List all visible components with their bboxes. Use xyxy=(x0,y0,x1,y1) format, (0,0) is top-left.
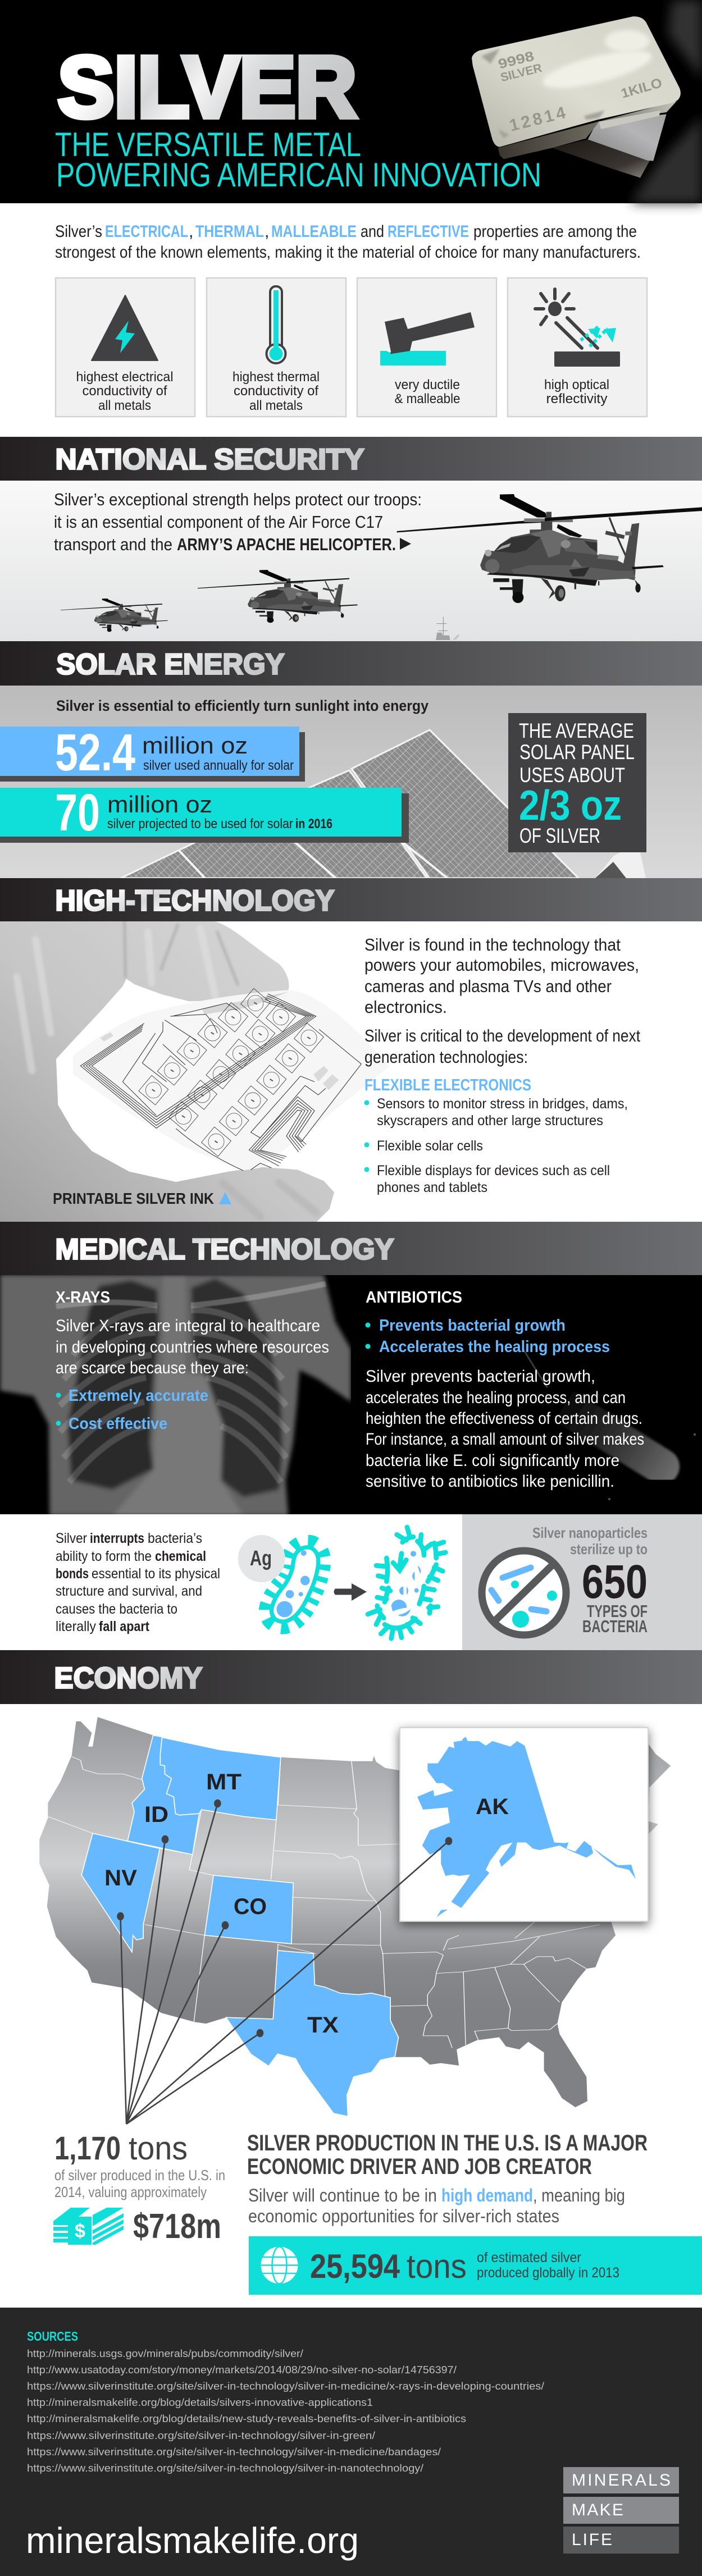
stat text: TYPES OF xyxy=(587,1601,648,1621)
heading bar: NATIONAL SECURITY xyxy=(55,444,364,476)
stat bar: 52.4 million oz: silver used annually for solar xyxy=(143,758,294,773)
bullet list: skyscrapers and other large structures xyxy=(377,1113,603,1129)
logo: LIFE xyxy=(572,2531,612,2549)
text block: , meaning big xyxy=(533,2185,625,2205)
state labels: CO xyxy=(234,1894,267,1919)
state labels: TX xyxy=(307,2013,339,2038)
text block: essential to its physical xyxy=(92,1566,220,1582)
text block: ability to form the xyxy=(56,1549,152,1564)
heading bar: HIGH-TECHNOLOGY xyxy=(55,885,335,917)
stat bar: 70 million oz: 70 xyxy=(55,783,100,842)
block: x-rays: in developing countries where resources xyxy=(56,1338,329,1356)
stat bar: global production xyxy=(249,2236,702,2295)
bullet list: Flexible solar cells xyxy=(377,1138,483,1154)
subheading: FLEXIBLE ELECTRONICS xyxy=(364,1076,531,1094)
text block: causes the bacteria to xyxy=(56,1601,177,1617)
heading bar xyxy=(0,1650,702,1704)
ship mast xyxy=(436,616,459,640)
panel: how silver kills bacteria xyxy=(0,1514,462,1651)
block: antibiotics: For instance, a small amount of silver makes xyxy=(366,1430,644,1449)
photo: silver bars: 12814 xyxy=(508,103,568,135)
subtitle xyxy=(55,126,541,194)
block: antibiotics: heighten the effectiveness of certain drugs. xyxy=(366,1409,642,1428)
heading bar: MEDICAL TECHNOLOGY xyxy=(55,1233,394,1266)
state labels: ID xyxy=(144,1802,168,1827)
title: SILVER xyxy=(58,39,357,135)
heading bar: ECONOMY xyxy=(54,1662,202,1695)
block: antibiotics: Accelerates the healing process xyxy=(379,1338,610,1356)
heading: economic driver: ECONOMIC DRIVER AND JOB CREATOR xyxy=(247,2154,592,2179)
text block xyxy=(54,490,422,554)
block: antibiotics: ANTIBIOTICS xyxy=(366,1289,462,1307)
block: antibiotics: bacteria like E. coli significantly more xyxy=(366,1451,619,1470)
label: high optical xyxy=(544,377,609,392)
sources: http://mineralsmakelife.org/blog/details/silvers-innovative-applications1 xyxy=(27,2397,373,2408)
intro text: and xyxy=(361,222,384,241)
panel background xyxy=(0,921,702,1222)
label xyxy=(76,369,173,413)
label: conductivity of xyxy=(82,383,167,399)
label: all metals xyxy=(249,398,303,413)
sources: https://www.silverinstitute.org/site/silver-in-technology/silver-in-medicine/x-rays-in-developing-countries/ xyxy=(27,2381,544,2392)
map of united states xyxy=(39,1717,671,2116)
intro text: REFLECTIVE xyxy=(388,222,469,241)
sources: https://www.silverinstitute.org/site/silver-in-technology/silver-in-green/ xyxy=(27,2430,375,2441)
stat: $718m: $718m xyxy=(133,2207,221,2246)
stat bar: 70 million oz: silver projected to be used for solar xyxy=(107,816,293,832)
text block: interrupts xyxy=(90,1531,144,1546)
block: x-rays: X-RAYS xyxy=(56,1289,110,1307)
heading bar xyxy=(0,1222,702,1275)
panel background xyxy=(0,686,702,878)
label: reflectivity xyxy=(546,391,608,407)
blue states xyxy=(81,1735,399,2116)
callout: 2/3 oz: OF SILVER xyxy=(519,824,600,847)
label: very ductile xyxy=(395,377,460,392)
label: all metals xyxy=(98,398,151,413)
text block: chemical xyxy=(155,1549,206,1564)
callout: 2/3 oz: USES ABOUT xyxy=(519,764,625,787)
panel background xyxy=(0,1275,702,1514)
icon: hammer xyxy=(380,312,475,366)
stat: 1,170 tons: tons xyxy=(129,2130,188,2167)
intro text xyxy=(55,222,641,262)
text block: Silver xyxy=(56,1531,87,1546)
stat: 1,170 tons: 1,170 xyxy=(54,2130,121,2167)
text block: high demand xyxy=(441,2185,533,2205)
text block: fall apart xyxy=(99,1619,150,1634)
icon: thermometer xyxy=(266,286,285,363)
stat bar: 70 million oz xyxy=(0,783,409,843)
icon: silver atom: Ag xyxy=(250,1547,272,1570)
callout: 2/3 oz: THE AVERAGE xyxy=(519,719,634,742)
state labels: AK xyxy=(476,1794,509,1819)
stat bar: global production: of estimated silver xyxy=(477,2250,581,2266)
inset: alaska xyxy=(400,1728,648,1921)
state labels: MT xyxy=(206,1770,241,1794)
block: x-rays: Cost effective xyxy=(69,1415,167,1433)
panel: thermal xyxy=(207,278,346,417)
text block: transport and the xyxy=(54,535,172,554)
heading: economic driver xyxy=(247,2131,648,2179)
sources: http://minerals.usgs.gov/minerals/pubs/commodity/silver/ xyxy=(27,2348,303,2359)
text block: powers your automobiles, microwaves, xyxy=(364,955,639,975)
subtitle: THE VERSATILE METAL xyxy=(55,126,361,163)
sources: http://www.usatoday.com/story/money/markets/2014/08/29/no-silver-no-solar/14756397/ xyxy=(27,2364,457,2376)
arrow xyxy=(400,538,411,550)
logo: MAKE xyxy=(572,2501,623,2519)
sources: SOURCES xyxy=(27,2329,78,2344)
stat text: sterilize up to xyxy=(570,1541,648,1558)
sources: https://www.silverinstitute.org/site/silver-in-technology/silver-in-medicine/bandages/ xyxy=(27,2446,441,2458)
text block: Silver is critical to the development of next xyxy=(364,1026,640,1045)
label xyxy=(394,377,461,407)
website: mineralsmakelife.org xyxy=(26,2520,359,2561)
bullet list xyxy=(364,1096,628,1195)
stat bar: 70 million oz: million oz xyxy=(107,791,212,817)
photo: silver bars: SILVER xyxy=(499,61,543,84)
block: antibiotics: sensitive to antibiotics like penicillin. xyxy=(366,1472,614,1491)
arrow xyxy=(334,1583,367,1601)
block: antibiotics xyxy=(365,1289,644,1491)
callout: 2/3 oz: SOLAR PANEL xyxy=(519,741,635,764)
stat bar: 52.4 million oz: 52.4 xyxy=(55,723,135,782)
block: antibiotics: accelerates the healing process, and can xyxy=(366,1389,626,1407)
stat bar: global production: produced globally in 2013 xyxy=(477,2265,619,2281)
icon: bacterium xyxy=(271,1547,318,1622)
icon: stacks of cash: $ xyxy=(75,2221,85,2242)
stat: 1,170 tons: 2014, valuing approximately xyxy=(54,2184,207,2200)
header panel xyxy=(0,0,702,203)
panel: electrical xyxy=(56,278,195,417)
heading bar: SOLAR ENERGY xyxy=(56,648,284,680)
stat bar: global production: tons xyxy=(407,2248,467,2285)
intro text: , xyxy=(189,222,193,241)
section: national security xyxy=(0,437,702,642)
panel: malleable xyxy=(357,278,496,417)
section: high-technology xyxy=(0,878,702,1222)
state borders xyxy=(48,1757,600,2048)
text block: Silver will continue to be in xyxy=(248,2185,437,2205)
text block: bonds xyxy=(56,1566,89,1582)
sources: http://mineralsmakelife.org/blog/details/new-study-reveals-benefits-of-silver-in-antibiotics xyxy=(27,2413,466,2424)
block: x-rays: Extremely accurate xyxy=(69,1387,208,1405)
section: medical technology xyxy=(0,1222,702,1651)
sources xyxy=(27,2329,544,2474)
logo xyxy=(563,2467,679,2554)
text block: ARMY’S APACHE HELICOPTER. xyxy=(177,535,396,554)
text block xyxy=(364,935,640,1067)
stat bar: 52.4 million oz: million oz xyxy=(142,732,248,759)
sources: https://www.silverinstitute.org/site/silver-in-technology/silver-in-nanotechnology/ xyxy=(27,2463,423,2474)
text block: cameras and plasma TVs and other xyxy=(364,976,612,996)
text block: Silver is found in the technology that xyxy=(364,935,621,954)
stat bar: 70 million oz: in 2016 xyxy=(295,816,332,832)
helicopter: small xyxy=(61,599,168,632)
section: solar energy xyxy=(0,641,702,878)
text block: electronics. xyxy=(364,997,447,1017)
intro text: THERMAL xyxy=(195,222,264,241)
photo: solar panels xyxy=(121,730,646,878)
stat text: 650 xyxy=(582,1555,648,1608)
intro text: ELECTRICAL xyxy=(105,222,188,241)
panel: reflective xyxy=(508,278,647,417)
bullet list: Sensors to monitor stress in bridges, dams, xyxy=(377,1096,628,1112)
callout: 2/3 oz: 2/3 oz xyxy=(519,782,622,829)
photo: silver bars: 9998 xyxy=(496,49,536,72)
label xyxy=(233,369,320,413)
icon: globe xyxy=(261,2247,298,2284)
photo: bacterium xyxy=(522,1348,696,1500)
text block: Silver is essential to efficiently turn sunlight into energy xyxy=(56,697,429,714)
helicopter: medium xyxy=(198,570,358,623)
icon: stacks of cash xyxy=(53,2208,124,2245)
section: economy xyxy=(0,1650,702,2295)
icon: triangle with lightning bolt xyxy=(92,295,158,360)
heading bar xyxy=(0,641,702,686)
caption: PRINTABLE SILVER INK xyxy=(53,1190,214,1207)
stat: 1,170 tons: of silver produced in the U.S. in xyxy=(54,2167,225,2184)
text block: it is an essential component of the Air Force C17 xyxy=(54,512,383,532)
icon: silver atom xyxy=(238,1535,285,1582)
icon: bacterium falling apart xyxy=(368,1527,445,1638)
block: x-rays: are scarce because they are: xyxy=(56,1359,249,1377)
circuit traces xyxy=(80,994,361,1171)
block: antibiotics: Prevents bacterial growth xyxy=(379,1317,566,1335)
label: conductivity of xyxy=(234,383,318,399)
state labels: NV xyxy=(104,1866,137,1890)
photo: silver bars: 1KILO xyxy=(619,75,664,102)
heading bar xyxy=(0,437,702,481)
label: highest electrical xyxy=(76,369,173,385)
pointer lines xyxy=(118,1800,452,2124)
text block: economic opportunities for silver-rich states xyxy=(248,2206,559,2226)
label: highest thermal xyxy=(233,369,320,385)
block: x-rays xyxy=(56,1289,329,1433)
label: & malleable xyxy=(394,391,461,407)
heading bar xyxy=(0,878,702,921)
text block xyxy=(56,1531,220,1634)
stat text: Silver nanoparticles xyxy=(532,1524,648,1541)
intro text: Silver’s xyxy=(55,222,102,241)
text block: literally xyxy=(56,1619,96,1634)
panel: nanoparticles xyxy=(462,1514,702,1651)
subtitle: POWERING AMERICAN INNOVATION xyxy=(56,156,541,194)
icon: sun reflecting xyxy=(535,289,620,367)
stat bar: 52.4 million oz xyxy=(0,723,305,782)
text block: bacteria’s xyxy=(148,1531,202,1546)
intro text: MALLEABLE xyxy=(271,222,357,241)
intro text: , xyxy=(265,222,269,241)
footer panel xyxy=(0,2308,702,2576)
logo: MINERALS xyxy=(572,2471,671,2490)
block: antibiotics: Silver prevents bacterial growth, xyxy=(366,1367,595,1386)
callout: 2/3 oz xyxy=(508,713,646,852)
text block: Silver’s exceptional strength helps protect our troops: xyxy=(54,490,422,509)
stat text xyxy=(532,1524,648,1636)
photo: silver bars xyxy=(472,0,702,203)
helicopter: large xyxy=(397,494,702,603)
bullet list: phones and tablets xyxy=(377,1180,487,1195)
text block: generation technologies: xyxy=(364,1047,528,1067)
block: x-rays: Silver X-rays are integral to healthcare xyxy=(56,1317,320,1335)
panel background xyxy=(0,481,702,642)
text block xyxy=(248,2185,625,2226)
stat text: BACTERIA xyxy=(582,1616,648,1636)
photo: gloved hand holding flexible circuit xyxy=(0,921,389,1222)
stat bar: global production: 25,594 xyxy=(310,2248,400,2285)
bullet list: Flexible displays for devices such as cell xyxy=(377,1163,610,1179)
state labels xyxy=(104,1770,509,2038)
stat: 1,170 tons xyxy=(54,2130,225,2200)
label xyxy=(544,377,609,407)
intro text: properties are among the xyxy=(473,222,637,241)
photo: chest x-ray xyxy=(0,1275,351,1514)
icon: no bacteria sign xyxy=(482,1551,566,1635)
text block: structure and survival, and xyxy=(56,1583,202,1599)
